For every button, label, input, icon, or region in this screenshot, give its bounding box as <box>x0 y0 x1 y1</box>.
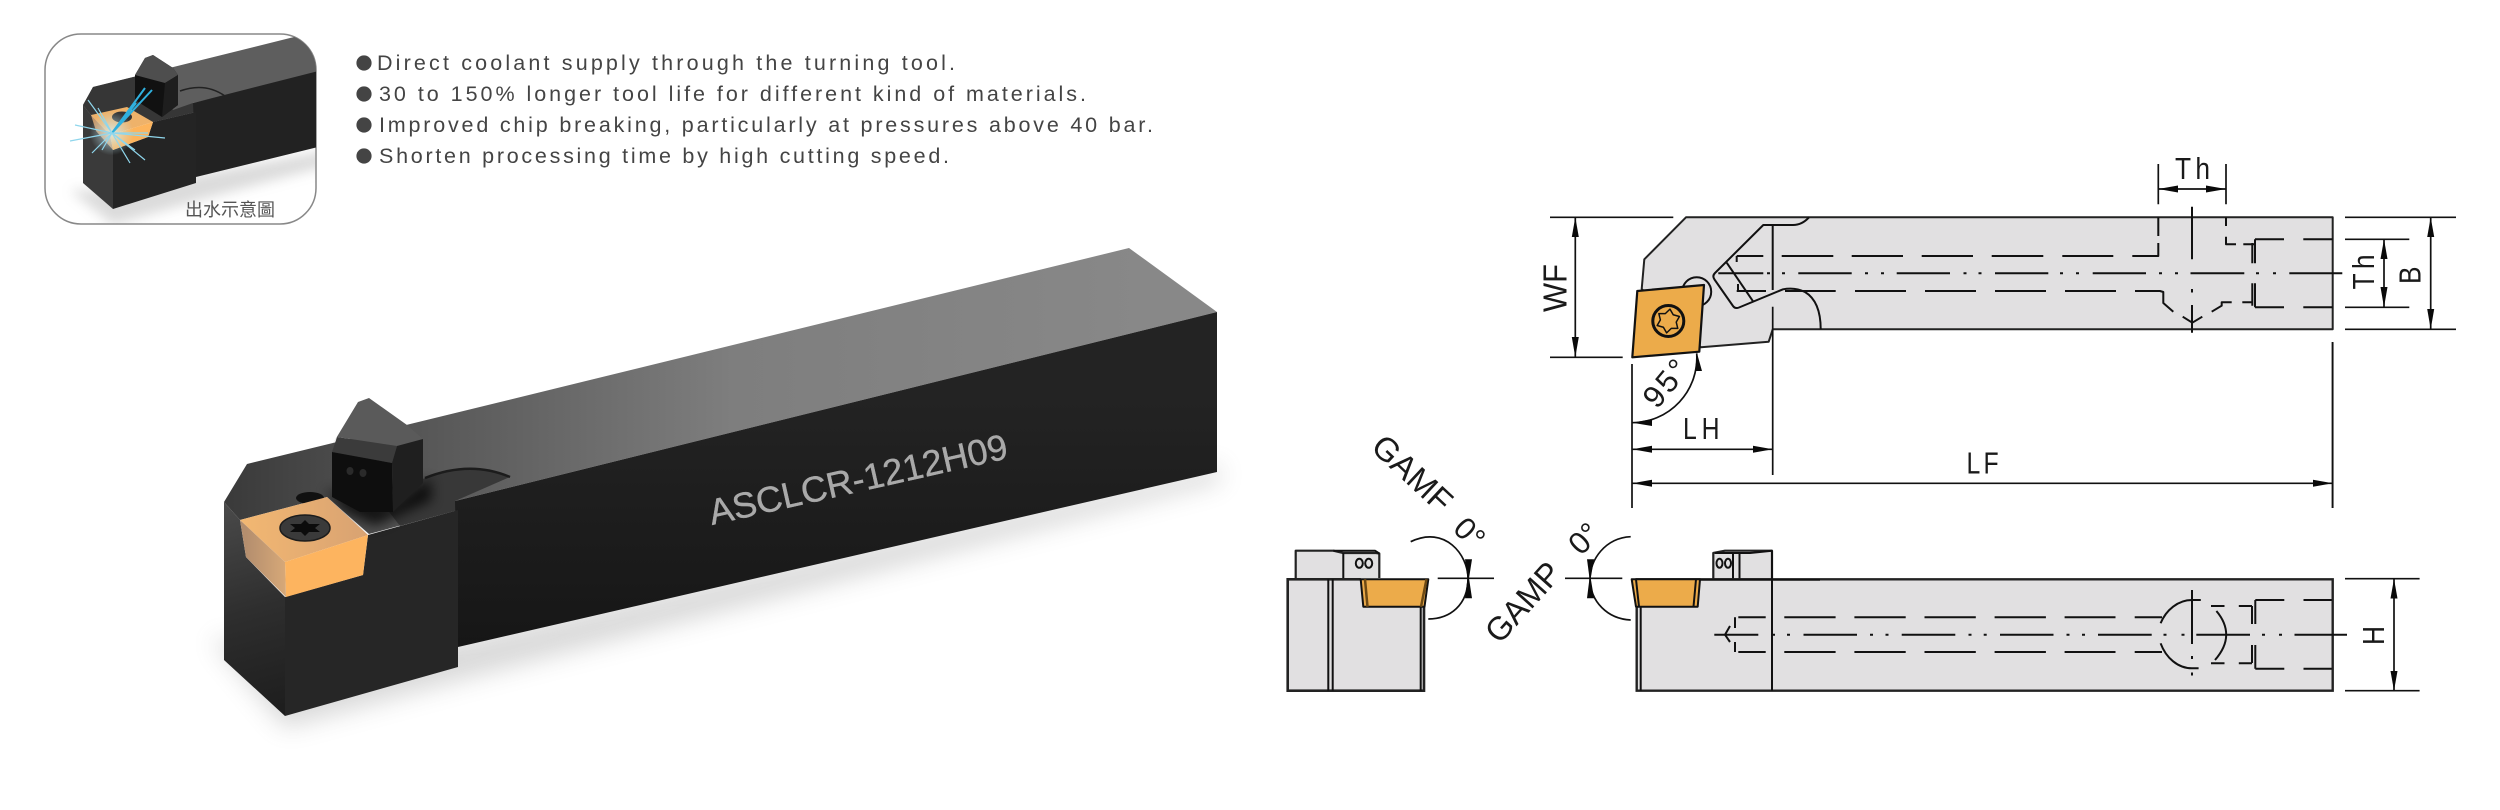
head left face <box>224 502 285 716</box>
hidden lines: coolant bore <box>1737 217 2333 323</box>
dimension Th vertical: Th <box>2347 250 2382 290</box>
technical drawing: top view <box>1536 152 2456 508</box>
bullet 1: Direct coolant supply through the turning tool. <box>377 51 955 75</box>
dimension WF: WF <box>1536 264 1574 312</box>
rake angle arc <box>1590 537 1631 620</box>
head front face <box>285 510 458 716</box>
label GAMF angle: 0° <box>1447 510 1492 556</box>
shaded relief under arc <box>380 469 510 526</box>
clamp inner edge <box>1727 263 1753 302</box>
dimension H: H <box>2357 626 2391 645</box>
dimension LF <box>1632 446 2333 487</box>
holder outline <box>1642 217 2333 347</box>
bore circle in side view <box>2161 600 2226 668</box>
label GAMP angle: 0° <box>1561 516 1607 561</box>
side view edges <box>1636 551 1820 691</box>
dimension Th vertical <box>2347 239 2388 307</box>
pin circle behind insert <box>1682 277 1711 306</box>
label GAMF: GAMF <box>1365 427 1460 520</box>
rake angle reference line <box>1565 577 1622 579</box>
carbide insert <box>240 492 368 597</box>
insert in side view <box>1632 579 1700 607</box>
clamp pocket contour <box>1713 217 1821 329</box>
insert <box>1632 285 1704 357</box>
panel frame <box>45 34 316 224</box>
technical drawing: side view with GAMP <box>1477 342 2420 691</box>
dimension H <box>2357 579 2398 691</box>
torx screw <box>1653 306 1684 336</box>
dimension LF: LF <box>1966 446 2002 480</box>
holder top face <box>224 248 1217 534</box>
rake angle arrows <box>1587 559 1594 598</box>
insert in end view <box>1361 579 1428 607</box>
pocket in body <box>1361 578 1430 607</box>
technical drawing: end view with GAMF <box>1288 427 1494 691</box>
model engraving: ASCLCR-1212H09 <box>705 426 1011 533</box>
dimension 95 degree angle: 95° <box>1636 350 1697 414</box>
insert relief lines <box>1365 579 1426 607</box>
body in end view <box>1288 579 1424 691</box>
ground shadow <box>212 465 1220 728</box>
dimension B <box>2394 217 2434 329</box>
feature bullet list <box>356 51 1153 168</box>
dimension B: B <box>2394 266 2428 284</box>
clamp in end view <box>1296 551 1379 579</box>
body edges <box>1328 579 1421 691</box>
caption: 出水示意圖 <box>185 200 275 220</box>
centre line <box>1714 590 2347 676</box>
bullet 3: Improved chip breaking, particularly at pressures above 40 bar. <box>379 113 1153 137</box>
centre line <box>1718 207 2342 333</box>
panel: coolant outlet diagram <box>45 32 330 225</box>
hidden lines <box>1725 600 2332 669</box>
body in side view <box>1637 579 2333 691</box>
dimension WF <box>1536 217 1579 357</box>
clamp <box>332 398 423 512</box>
bullet 4: Shorten processing time by high cutting speed. <box>379 144 949 168</box>
rake angle reference line <box>1438 577 1494 579</box>
rake angle arc <box>1411 537 1468 619</box>
icon: tool close-up with coolant spray <box>70 32 330 225</box>
rake angle arrows <box>1465 559 1472 598</box>
relief arc <box>425 469 510 478</box>
label GAMP: GAMP <box>1477 554 1568 650</box>
extension lines <box>1550 164 2456 508</box>
dimension Th horizontal: Th <box>2175 152 2214 187</box>
dimension LH: LH <box>1683 411 1724 446</box>
extension lines for H <box>2332 342 2420 691</box>
dimension Th horizontal <box>2158 152 2226 192</box>
insert screw <box>280 515 330 541</box>
clamp contact shadow <box>325 478 432 526</box>
clamp in side view <box>1713 551 1772 579</box>
product render: turning tool holder <box>212 248 1220 728</box>
bullet 2: 30 to 150% longer tool life for different kind of materials. <box>379 82 1086 106</box>
holder long front face <box>455 312 1217 647</box>
dimension LH <box>1632 411 1773 453</box>
